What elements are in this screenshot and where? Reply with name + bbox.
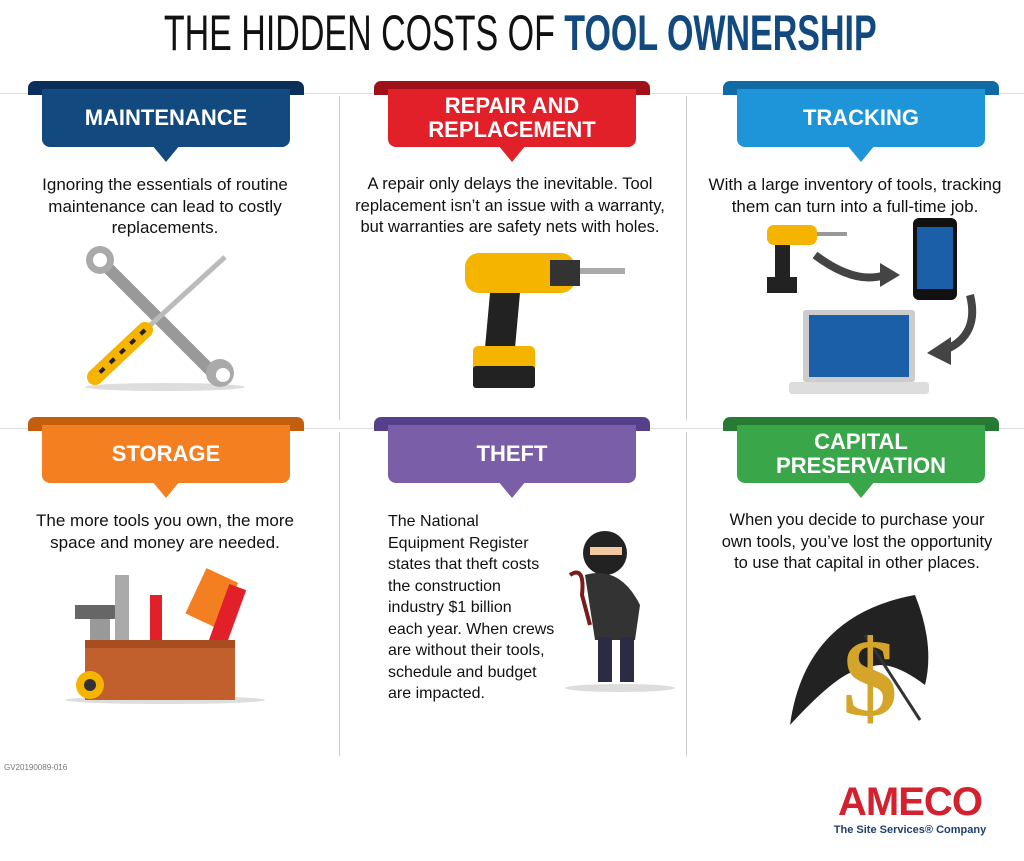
text: maintenance: maintenance can lead to costly	[48, 196, 282, 216]
text: repair	[355, 175, 665, 236]
text: storage	[36, 511, 294, 552]
banner: repair	[374, 81, 650, 162]
text: theft: industry $1 billion	[388, 599, 512, 616]
text: capital: own tools, you’ve lost the opportunity	[722, 532, 992, 550]
text: theft: the construction	[388, 578, 501, 594]
text: repair: A repair only delays the inevitable. Tool	[368, 175, 652, 193]
text: capital: to use that capital in other places.	[734, 554, 980, 572]
banner: storage	[28, 417, 304, 498]
banner: tracking: TRACKING	[803, 105, 919, 130]
text: theft: are without their tools,	[388, 642, 545, 659]
text: theft: states that theft costs	[388, 556, 539, 573]
text: storage: space and money are needed.	[50, 532, 280, 552]
banner: maintenance: MAINTENANCE	[85, 105, 247, 130]
banner: storage: STORAGE	[112, 441, 220, 466]
icon: umbrella and dollar	[790, 595, 928, 735]
text: theft: schedule and budget	[388, 664, 537, 680]
text: theft: are impacted.	[388, 685, 485, 702]
banner: tracking	[723, 81, 999, 162]
text: repair: but warranties are safety nets with holes.	[360, 218, 659, 236]
text: theft: The National	[388, 513, 479, 530]
icon: thief	[565, 531, 675, 692]
icon: drill	[465, 253, 625, 388]
text: theft: Equipment Register	[388, 534, 529, 552]
text: repair: replacement isn’t an issue with a warranty,	[355, 196, 665, 214]
logo: AMECO: AMECO	[838, 780, 982, 824]
text: storage: The more tools you own, the more	[36, 511, 294, 530]
banner: theft	[374, 417, 650, 498]
logo: AMECO: The Site Services® Company	[834, 824, 986, 836]
icon: wrench and screwdriver	[85, 246, 245, 391]
text: theft	[388, 513, 554, 702]
text: tracking: With a large inventory of tools, tracking	[709, 175, 1001, 194]
banner: capital: PRESERVATION	[776, 453, 946, 478]
title: THE HIDDEN COSTS OF TOOL OWNERSHIP	[164, 5, 877, 61]
text: maintenance: Ignoring the essentials of routine	[42, 175, 288, 194]
banner: theft: THEFT	[477, 441, 547, 466]
text: tracking: them can turn into a full-time job.	[732, 196, 978, 216]
text: capital: When you decide to purchase your	[730, 511, 984, 529]
text: tracking	[708, 175, 1001, 216]
text: maintenance	[42, 175, 288, 237]
footnote code: GV20190089-016	[4, 763, 67, 772]
banner: maintenance	[28, 81, 304, 162]
text: maintenance: replacements.	[112, 218, 218, 237]
icon: tracking devices	[767, 218, 976, 394]
icon: toolbox	[65, 568, 265, 704]
banner: capital	[723, 417, 999, 498]
banner: repair: REPAIR AND	[445, 93, 579, 118]
banner: repair: REPLACEMENT	[428, 117, 596, 142]
banner: capital: CAPITAL	[814, 429, 908, 454]
text: theft: each year. When crews	[388, 620, 554, 638]
text: capital	[722, 511, 992, 572]
